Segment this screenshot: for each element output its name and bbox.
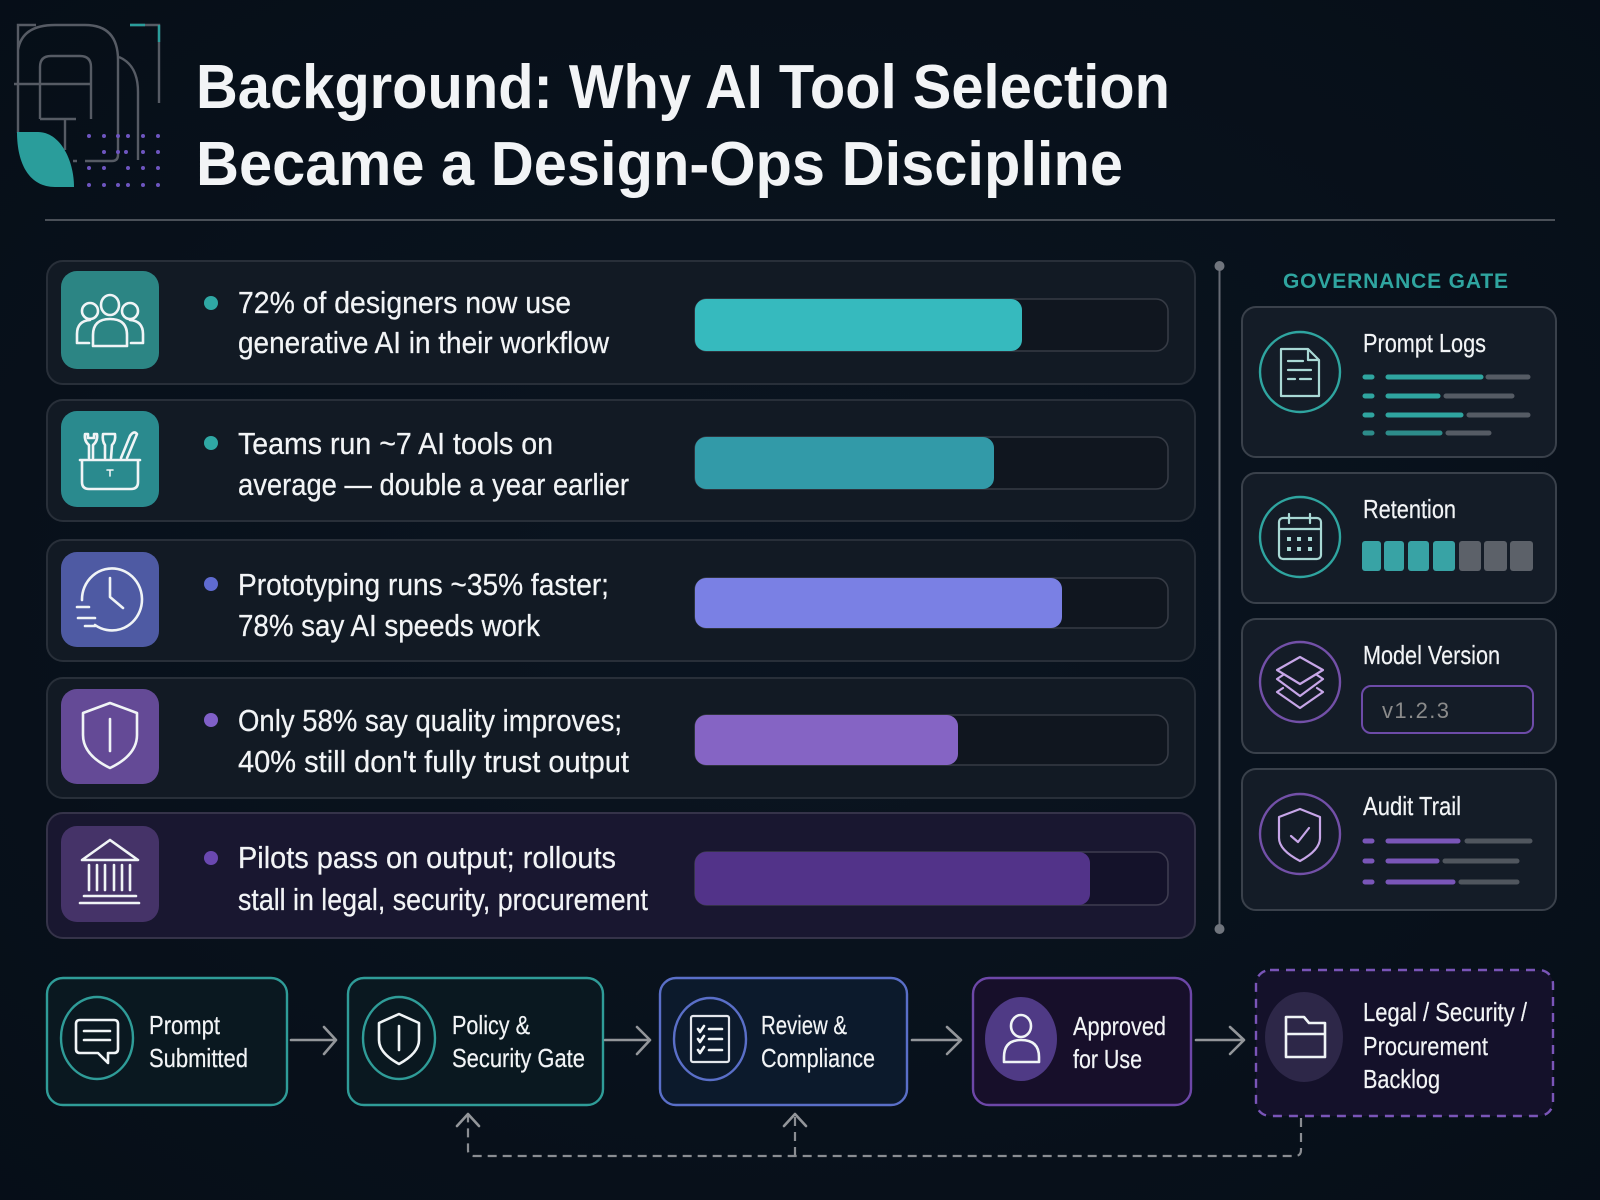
icon: shield: [363, 997, 435, 1079]
flow step: prompt submitted: [47, 978, 287, 1105]
audit lines: [1365, 841, 1530, 882]
icon: person: [985, 997, 1057, 1081]
text: rollout stat: Pilots pass on output; rollouts: [238, 840, 616, 875]
icon: people: [61, 271, 159, 369]
flow step: policy and security gate: Policy &: [452, 1010, 530, 1040]
arrow: step 2 to 3: [605, 1027, 650, 1054]
flow step: approved for use: Approved: [1073, 1011, 1166, 1041]
flow step: legal, security, procurement backlog: [1256, 970, 1553, 1116]
flow step: legal, security, procurement backlog: Backlog: [1363, 1064, 1440, 1094]
panel: stat row 2: [47, 400, 1195, 521]
panel: model version: Model Version: [1363, 640, 1500, 670]
flow step: approved for use: [973, 978, 1191, 1105]
icon: document: [1260, 332, 1340, 412]
title: [196, 53, 1170, 199]
text: quality stat: Only 58% say quality improves;: [238, 703, 622, 738]
panel: retention: [1242, 473, 1556, 603]
icon: checklist: [674, 998, 746, 1080]
feedback loop: dashed return arrows: [457, 1114, 1301, 1156]
text: adoption stat: [238, 285, 610, 360]
panel: stat row 5: [47, 813, 1195, 938]
flow step: prompt submitted: Prompt: [149, 1010, 221, 1040]
text: tools stat: Teams run ~7 AI tools on: [238, 426, 553, 461]
title: Background: Why AI Tool Selection: [196, 53, 1170, 122]
bar: quality: [695, 715, 1168, 765]
bar: tools: [695, 437, 1168, 489]
flow step: policy and security gate: [348, 978, 603, 1105]
icon: chat bubble: [61, 997, 133, 1079]
panel: prompt logs: [1242, 307, 1556, 457]
title: Became a Design-Ops Discipline: [196, 130, 1123, 199]
text: adoption stat: 72% of designers now use: [238, 285, 571, 320]
text: adoption stat: generative AI in their workflow: [238, 325, 610, 360]
flow step: review and compliance: Compliance: [761, 1043, 875, 1073]
icon: layers: [1260, 642, 1340, 722]
flow step: prompt submitted: Submitted: [149, 1043, 248, 1073]
icon: shield: [61, 689, 159, 784]
log lines: [1365, 377, 1528, 433]
arrow: step 1 to 2: [291, 1027, 336, 1054]
panel: stat row 3: [47, 540, 1195, 661]
governance timeline rail: [1214, 261, 1224, 934]
flow step: approved for use: for Use: [1073, 1044, 1142, 1074]
flow step: review and compliance: Review &: [761, 1010, 847, 1040]
heading: governance gate: GOVERNANCE GATE: [1283, 270, 1508, 293]
arrow: step 3 to 4: [912, 1027, 961, 1054]
version field: v1.2.3: [1382, 698, 1449, 723]
text: speed stat: 78% say AI speeds work: [238, 608, 540, 643]
logo: abstract line art with leaf and dots: [14, 25, 160, 187]
version field: [1362, 686, 1533, 733]
bar: rollout: [695, 852, 1168, 905]
bar: speed: [695, 578, 1168, 628]
panel: audit trail: [1242, 769, 1556, 910]
flow step: legal, security, procurement backlog: Procurement: [1363, 1031, 1489, 1061]
icon: shield check: [1260, 794, 1340, 874]
text: tools stat: [238, 426, 629, 502]
retention blocks: [1362, 541, 1533, 571]
text: rollout stat: [238, 840, 648, 917]
panel: retention: Retention: [1363, 494, 1456, 524]
text: speed stat: [238, 567, 609, 643]
bar: 72%: [695, 299, 1168, 351]
arrow: step 4 to backlog: [1196, 1027, 1244, 1054]
flow step: policy and security gate: Security Gate: [452, 1043, 585, 1073]
icon: toolbox: [61, 411, 159, 507]
text: tools stat: average — double a year earlier: [238, 467, 629, 502]
text: quality stat: 40% still don't fully trust output: [238, 744, 629, 779]
flow step: legal, security, procurement backlog: Legal / Security /: [1363, 997, 1528, 1027]
flow step: review and compliance: [660, 978, 907, 1105]
panel: stat row 4: [47, 678, 1195, 798]
text: speed stat: Prototyping runs ~35% faster;: [238, 567, 609, 602]
text: rollout stat: stall in legal, security, procurement: [238, 882, 648, 917]
panel: model version: [1242, 619, 1556, 753]
icon: fast clock: [61, 552, 159, 647]
panel: audit trail: Audit Trail: [1363, 791, 1461, 821]
text: quality stat: [238, 703, 629, 779]
panel: prompt logs: Prompt Logs: [1363, 328, 1486, 358]
icon: calendar: [1260, 497, 1340, 577]
panel: stat row 1: [47, 261, 1195, 384]
icon: institution: [61, 826, 159, 922]
icon: folder: [1265, 992, 1343, 1082]
